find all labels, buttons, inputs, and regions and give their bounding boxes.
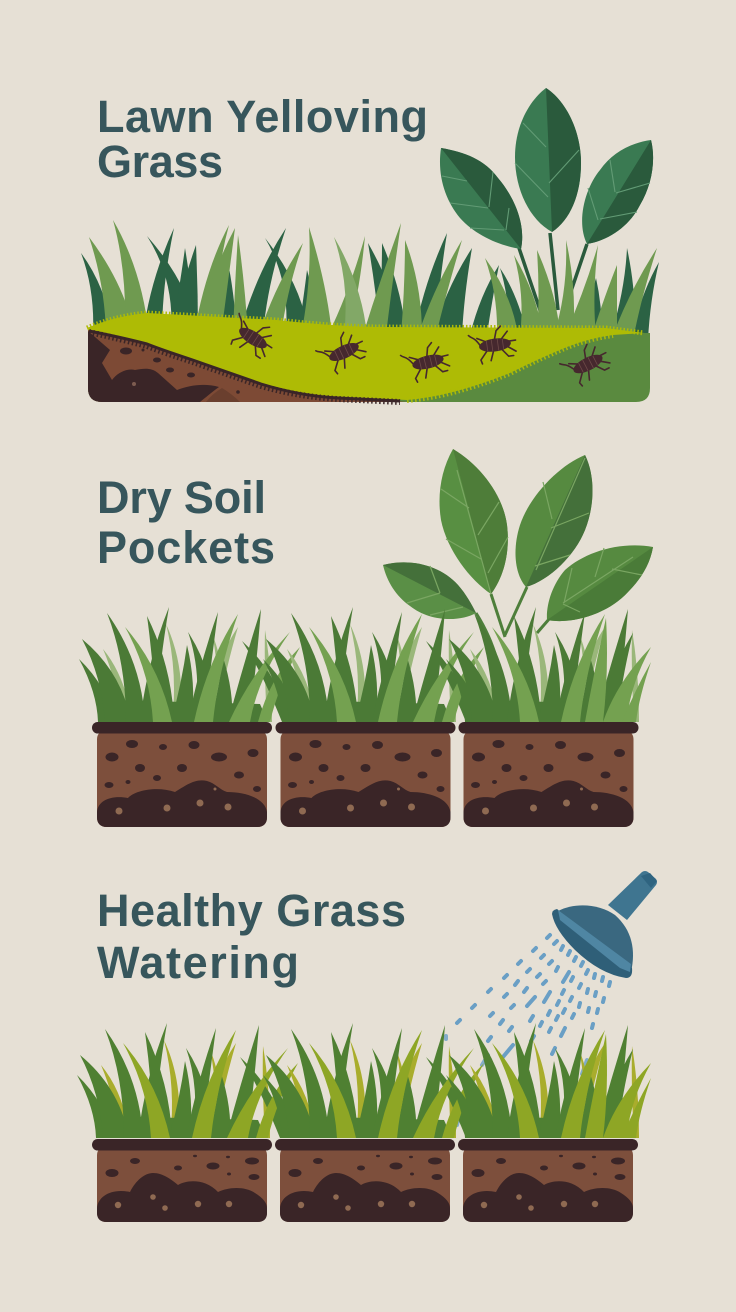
heading: Lawn Yelloving Grass: Grass xyxy=(97,136,223,187)
soil and green ground slice xyxy=(87,313,650,402)
grass tufts xyxy=(79,607,651,722)
grass blades: lawn xyxy=(81,220,659,340)
heading: Healthy Grass Watering xyxy=(97,885,406,988)
icon: bugs xyxy=(223,309,614,390)
heading: Healthy Grass Watering: Watering xyxy=(97,937,299,988)
plant: dark green leaves xyxy=(440,88,653,313)
heading: Healthy Grass Watering: Healthy Grass xyxy=(97,885,406,936)
panel: dry soil pockets xyxy=(79,449,653,827)
heading: Dry Soil Pockets: Dry Soil xyxy=(97,472,266,523)
heading: Dry Soil Pockets: Pockets xyxy=(97,522,275,573)
panel: healthy grass watering xyxy=(77,871,657,1222)
yellow-green turf band xyxy=(87,313,644,400)
grass tufts xyxy=(77,1023,651,1138)
icon: shower head xyxy=(552,871,657,978)
plant: mid green leaves xyxy=(383,449,653,660)
water drops xyxy=(446,935,610,1125)
soil boxes xyxy=(92,722,638,827)
soil boxes xyxy=(92,1139,638,1222)
heading: Lawn Yelloving Grass xyxy=(97,91,428,187)
heading: Lawn Yelloving Grass: Lawn Yelloving xyxy=(97,91,428,142)
heading: Dry Soil Pockets xyxy=(97,472,275,573)
panel: lawn yellowing grass xyxy=(81,88,659,402)
